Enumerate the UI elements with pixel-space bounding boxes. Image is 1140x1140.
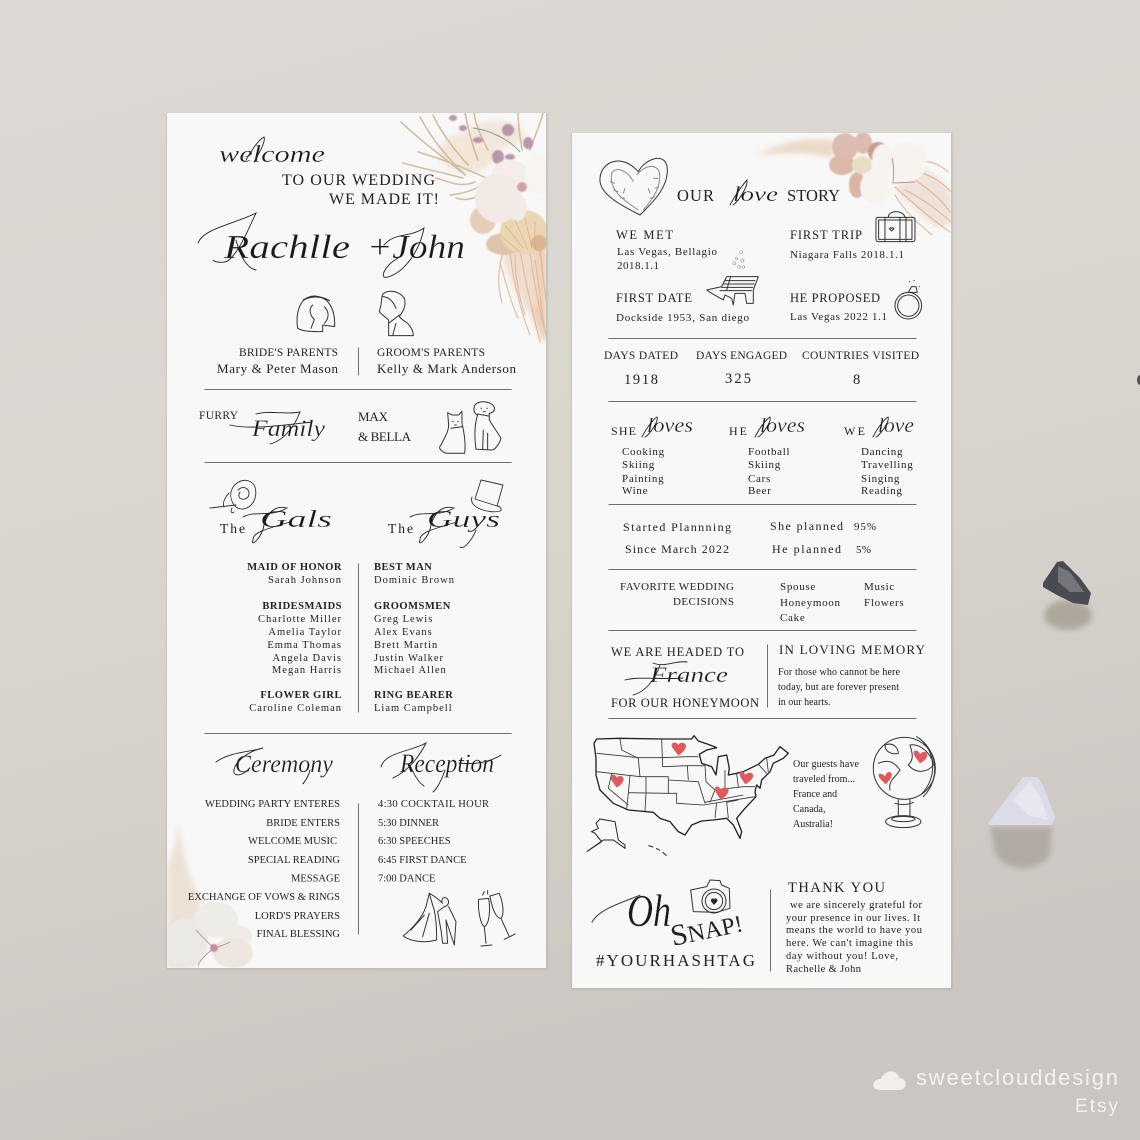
column: he loves: Cars bbox=[748, 473, 771, 485]
stat: countries visited: COUNTRIES VISITED bbox=[802, 350, 919, 362]
icon: top hat bbox=[472, 480, 503, 512]
heading: reception: Reception bbox=[399, 749, 494, 778]
list: decisions: Flowers bbox=[864, 597, 904, 609]
heading: we made it: WE MADE IT! bbox=[329, 191, 439, 208]
icon: rose bbox=[210, 480, 256, 513]
text: planning start: Since March 2022 bbox=[625, 542, 729, 556]
floral: bottom left orchid bbox=[164, 825, 253, 968]
text: guests traveled: France and bbox=[793, 789, 837, 800]
ceremony order list: LORD'S PRAYERS bbox=[255, 911, 340, 922]
reception schedule list bbox=[378, 799, 489, 884]
logo: sweetclouddesign: sweetclouddesign bbox=[916, 1065, 1118, 1090]
column: we love: love bbox=[878, 415, 914, 437]
stat: days engaged: 325 bbox=[725, 371, 751, 387]
heading: our love story: love bbox=[733, 182, 778, 206]
names script: +John bbox=[367, 229, 465, 266]
in loving memory block: in our hearts. bbox=[778, 697, 830, 708]
column: we love: Dancing bbox=[861, 446, 903, 458]
column: she loves: Painting bbox=[622, 473, 664, 485]
honeymoon block: FOR OUR HONEYMOON bbox=[611, 696, 759, 710]
column: he loves: Skiing bbox=[748, 459, 781, 471]
timeline: first date: FIRST DATE bbox=[616, 291, 692, 305]
ceremony order list: MESSAGE bbox=[291, 874, 340, 884]
map: alaska and hawaii bbox=[587, 819, 667, 856]
icon: small hearts bbox=[733, 251, 745, 268]
column: she loves: Skiing bbox=[622, 459, 655, 471]
list: decisions: Music bbox=[864, 581, 895, 593]
text: guests traveled: traveled from... bbox=[793, 774, 855, 785]
party list: groom's side: Greg Lewis bbox=[374, 614, 433, 625]
stat: days dated bbox=[604, 350, 678, 388]
card shadows bbox=[166, 113, 953, 990]
text: groom's parents: Kelly & Mark Anderson bbox=[377, 361, 516, 376]
text: bride's parents: BRIDE'S PARENTS bbox=[239, 347, 338, 359]
text: bride's parents: Mary & Peter Mason bbox=[217, 361, 338, 376]
thank you block: here. We can't imagine this bbox=[786, 938, 913, 949]
hashtag block: oh snap bbox=[592, 880, 755, 970]
text: pet names bbox=[358, 409, 412, 444]
in loving memory block: today, but are forever present bbox=[778, 682, 899, 693]
thank you block: your presence in our lives. It bbox=[786, 913, 920, 924]
column: we love bbox=[844, 415, 914, 497]
party list: bride's side: Amelia Taylor bbox=[268, 627, 342, 638]
heading: to our wedding: TO OUR WEDDING bbox=[282, 172, 435, 189]
party list: bride's side: Angela Davis bbox=[273, 653, 342, 664]
icon: groom bbox=[379, 291, 413, 336]
heading: the gals: The bbox=[220, 521, 245, 536]
list: decisions: Honeymoon bbox=[780, 597, 841, 609]
names script bbox=[198, 213, 465, 277]
icon: cat bbox=[440, 411, 465, 453]
icon: dancing couple bbox=[403, 893, 456, 945]
stat: countries visited: 8 bbox=[853, 372, 860, 388]
timeline: first trip bbox=[790, 228, 904, 261]
names script: Rachlle bbox=[223, 229, 350, 266]
party list: bride's side: Caroline Coleman bbox=[249, 703, 342, 714]
logo: sweetclouddesign: Etsy bbox=[1075, 1096, 1118, 1117]
reception schedule list: 5:30 DINNER bbox=[378, 818, 439, 829]
text: favorite decisions bbox=[620, 581, 734, 608]
ceremony order list: WELCOME MUSIC bbox=[248, 836, 337, 847]
timeline: first trip: Niagara Falls 2018.1.1 bbox=[790, 249, 904, 261]
text: who planned bbox=[770, 519, 876, 556]
divider: memory bbox=[766, 644, 768, 708]
in loving memory block bbox=[778, 642, 926, 708]
hashtag block: oh snap: SNAP! bbox=[668, 905, 746, 953]
text: who planned: 5% bbox=[856, 544, 871, 556]
heading: the guys: Guys bbox=[427, 507, 500, 533]
text: groom's parents: GROOM'S PARENTS bbox=[377, 347, 485, 359]
icon: camera bbox=[691, 880, 730, 913]
text: favorite decisions: FAVORITE WEDDING bbox=[620, 581, 734, 593]
column: we love: WE bbox=[844, 424, 865, 438]
heading: the gals: Gals bbox=[260, 507, 332, 533]
party list: groom's side: Justin Walker bbox=[374, 653, 444, 664]
icon: dog bbox=[474, 402, 501, 450]
heading: ceremony: Ceremony bbox=[235, 751, 334, 778]
text: who planned: 95% bbox=[854, 521, 876, 533]
column: he loves: Beer bbox=[748, 485, 772, 497]
stat: days dated: 1918 bbox=[624, 372, 658, 388]
reception schedule list: 7:00 DANCE bbox=[378, 874, 435, 884]
list: decisions: Cake bbox=[780, 612, 805, 624]
honeymoon block bbox=[611, 645, 759, 710]
floral: top right orchids bbox=[755, 132, 951, 235]
party list: groom's side: Alex Evans bbox=[374, 627, 433, 638]
timeline: we met: 2018.1.1 bbox=[617, 260, 659, 272]
panel: wedding program card bbox=[164, 113, 552, 968]
column: he loves bbox=[729, 415, 805, 497]
divider: parents bbox=[358, 348, 360, 376]
logo: sweetclouddesign bbox=[873, 1065, 1118, 1117]
party list: bride's side: MAID OF HONOR bbox=[247, 562, 342, 573]
stat: days dated: DAYS DATED bbox=[604, 350, 678, 362]
divider: schedule bbox=[358, 804, 360, 934]
heading: our love story: STORY bbox=[787, 186, 840, 205]
timeline: he proposed bbox=[790, 291, 887, 323]
text: guests traveled: Our guests have bbox=[793, 759, 860, 770]
honeymoon block: France bbox=[649, 662, 728, 687]
map: united states with hearts bbox=[587, 736, 788, 856]
ceremony order list: FINAL BLESSING bbox=[257, 929, 340, 940]
party list: groom's side: RING BEARER bbox=[374, 690, 453, 701]
icon: champagne glasses bbox=[478, 891, 515, 946]
heading: furry family: FURRY bbox=[199, 410, 239, 422]
timeline: he proposed: HE PROPOSED bbox=[790, 291, 880, 305]
party list: groom's side: Brett Martin bbox=[374, 640, 438, 651]
heading: the gals bbox=[220, 507, 332, 543]
heading: the guys: The bbox=[388, 521, 413, 536]
icon: globe bbox=[873, 737, 935, 828]
thank you block bbox=[786, 880, 923, 975]
hashtag block: oh snap: #YOURHASHTAG bbox=[596, 951, 755, 970]
in loving memory block: IN LOVING MEMORY bbox=[779, 642, 926, 657]
floral: top right bouquet bbox=[401, 113, 552, 342]
heading: our love story bbox=[677, 180, 840, 206]
reception schedule list: 4:30 COCKTAIL HOUR bbox=[378, 799, 489, 810]
timeline: we met: WE MET bbox=[616, 228, 673, 242]
party list: bride's side bbox=[247, 562, 342, 714]
timeline: we met bbox=[616, 228, 718, 272]
party list: bride's side: Megan Harris bbox=[272, 665, 342, 676]
divider: thank you bbox=[770, 890, 772, 972]
stat: countries visited bbox=[802, 350, 919, 388]
list: decisions: Spouse bbox=[780, 581, 816, 593]
timeline: first trip: FIRST TRIP bbox=[790, 228, 862, 242]
text: bride's parents bbox=[217, 347, 338, 376]
column: he loves: Football bbox=[748, 446, 790, 458]
decoration: small stone edge bbox=[1137, 375, 1140, 385]
column: she loves bbox=[611, 415, 693, 497]
heading: furry family: Family bbox=[251, 416, 326, 441]
column: she loves: Cooking bbox=[622, 446, 665, 458]
map state lines bbox=[597, 739, 768, 818]
honeymoon block: WE ARE HEADED TO bbox=[611, 645, 744, 659]
timeline: he proposed: Las Vegas 2022 1.1 bbox=[790, 311, 887, 323]
stat: days engaged: DAYS ENGAGED bbox=[696, 350, 787, 362]
icon: bride bbox=[297, 296, 335, 332]
party list: groom's side: Dominic Brown bbox=[374, 575, 455, 586]
ceremony order list: WEDDING PARTY ENTERES bbox=[205, 799, 340, 810]
timeline: first date bbox=[616, 291, 750, 324]
text: guests traveled bbox=[793, 759, 860, 830]
text: pet names: MAX bbox=[358, 409, 389, 424]
text: who planned: He planned bbox=[772, 542, 841, 556]
text: guests traveled: Australia! bbox=[793, 819, 833, 830]
heading: the guys bbox=[388, 507, 500, 548]
reception schedule list: 6:30 SPEECHES bbox=[378, 836, 451, 847]
thank you block: THANK YOU bbox=[788, 880, 886, 896]
thank you block: day without you! Love, bbox=[786, 951, 898, 962]
ceremony order list: EXCHANGE OF VOWS & RINGS bbox=[188, 892, 340, 903]
decoration: dark stone bbox=[1043, 561, 1092, 630]
panel: love story card bbox=[572, 132, 951, 988]
ceremony order list: BRIDE ENTERS bbox=[266, 818, 340, 829]
map outline bbox=[594, 736, 788, 838]
heading: welcome bbox=[219, 137, 325, 168]
heading: our love story: OUR bbox=[677, 186, 714, 205]
party list: groom's side: BEST MAN bbox=[374, 562, 432, 573]
text: planning start bbox=[623, 520, 731, 556]
timeline: we met: Las Vegas, Bellagio bbox=[617, 246, 718, 258]
text: favorite decisions: DECISIONS bbox=[673, 596, 734, 608]
icon: heart wreath bbox=[600, 158, 667, 215]
heading: furry family bbox=[199, 410, 326, 444]
text: guests traveled: Canada, bbox=[793, 804, 826, 815]
party list: groom's side bbox=[374, 562, 455, 714]
heading: reception bbox=[381, 743, 501, 792]
heading: ceremony bbox=[216, 748, 334, 784]
divider: wedding party bbox=[358, 564, 360, 712]
icon: bench bbox=[707, 277, 758, 305]
heading: welcome: welcome bbox=[219, 142, 325, 168]
decoration: white stone bbox=[988, 777, 1055, 868]
thank you block: means the world to have you bbox=[786, 925, 923, 936]
text: pet names: & BELLA bbox=[358, 429, 412, 444]
thank you block: we are sincerely grateful for bbox=[790, 900, 922, 911]
party list: groom's side: Liam Campbell bbox=[374, 703, 453, 714]
hashtag block: oh snap: Oh bbox=[627, 885, 671, 936]
text: groom's parents bbox=[377, 347, 516, 376]
icon: suitcase bbox=[876, 212, 915, 242]
ceremony order list: SPECIAL READING bbox=[248, 855, 340, 866]
party list: bride's side: BRIDESMAIDS bbox=[262, 601, 342, 612]
column: she loves: loves bbox=[647, 415, 693, 437]
column: she loves: Wine bbox=[622, 485, 648, 497]
text: planning start: Started Plannning bbox=[623, 520, 731, 534]
party list: groom's side: Michael Allen bbox=[374, 665, 447, 676]
map hearts bbox=[611, 743, 753, 800]
party list: bride's side: Emma Thomas bbox=[267, 640, 342, 651]
column: she loves: SHE bbox=[611, 424, 636, 438]
party list: groom's side: GROOMSMEN bbox=[374, 601, 451, 612]
column: we love: Reading bbox=[861, 485, 903, 497]
column: he loves: loves bbox=[760, 415, 805, 437]
column: he loves: HE bbox=[729, 424, 747, 438]
column: we love: Singing bbox=[861, 473, 900, 485]
party list: bride's side: Sarah Johnson bbox=[268, 575, 342, 586]
thank you block: Rachelle & John bbox=[786, 964, 862, 975]
list: decisions bbox=[780, 581, 904, 624]
party list: bride's side: Charlotte Miller bbox=[258, 614, 342, 625]
column: we love: Travelling bbox=[861, 459, 913, 471]
icon: ring bbox=[895, 281, 922, 319]
in loving memory block: For those who cannot be here bbox=[778, 667, 901, 678]
party list: bride's side: FLOWER GIRL bbox=[260, 690, 342, 701]
timeline: first date: Dockside 1953, San diego bbox=[616, 312, 750, 324]
text: who planned: She planned bbox=[770, 519, 843, 533]
stat: days engaged bbox=[696, 350, 787, 387]
reception schedule list: 6:45 FIRST DANCE bbox=[378, 855, 466, 866]
ceremony order list bbox=[188, 799, 340, 940]
